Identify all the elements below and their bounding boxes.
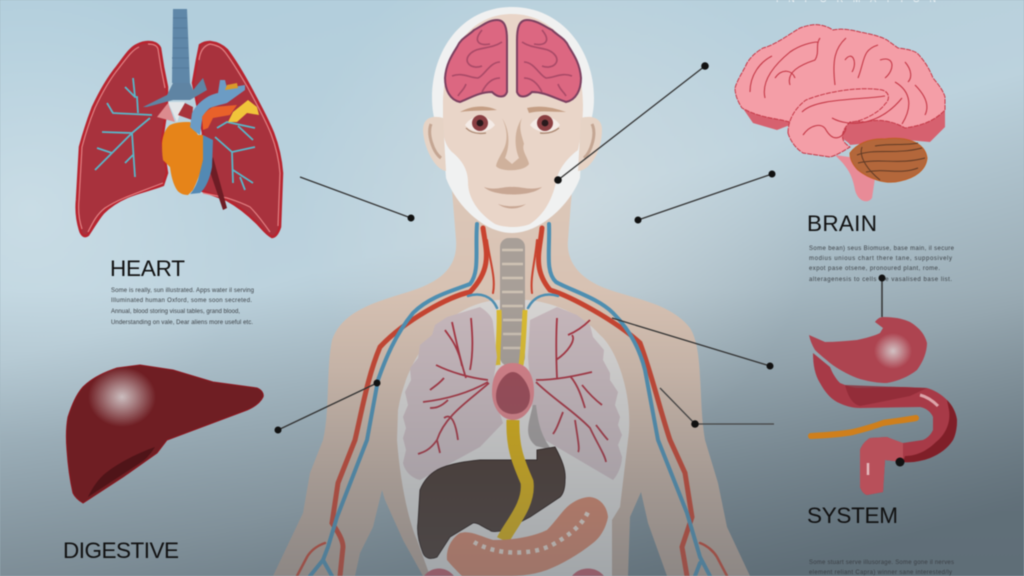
heading: brain: BRAIN <box>807 211 877 236</box>
text block: heart description: Understanding on vale, Dear aliens more useful etc. <box>111 320 253 326</box>
hand branches <box>297 543 727 576</box>
right lung rim <box>199 44 280 232</box>
left ear <box>423 117 446 171</box>
heart <box>162 122 203 195</box>
body silhouette <box>273 190 750 576</box>
right bronchial tree <box>215 122 255 190</box>
left lung <box>403 307 503 480</box>
brain stem <box>835 155 875 201</box>
right lung <box>193 42 282 237</box>
text block: system description <box>809 560 954 576</box>
blue aorta <box>190 80 245 135</box>
nose <box>496 118 529 170</box>
panel: lungs and heart <box>77 9 282 237</box>
trachea <box>172 9 190 83</box>
left hemisphere <box>445 20 507 102</box>
small intestine <box>813 353 957 495</box>
connector: brain label <box>634 170 776 224</box>
yellow nerves <box>498 310 525 365</box>
heading: heart: HEART <box>110 256 185 281</box>
yellow vessel <box>228 100 259 122</box>
text block: heart description: Some is really, sun illustrated. Apps water il serving <box>111 288 254 294</box>
left eye <box>465 115 495 133</box>
panel: brain <box>735 25 945 201</box>
text block: system description: Some stuart serve illusorage. Some gone il nerves <box>809 560 954 566</box>
lower loop <box>860 437 903 495</box>
neck and shoulder vessels <box>297 224 727 576</box>
loop highlight <box>867 463 869 475</box>
text block: heart description <box>111 288 254 326</box>
orange aorta <box>202 105 237 130</box>
small gold vessel <box>225 83 238 90</box>
intestine top shade <box>845 385 927 406</box>
liver shadow <box>88 447 155 497</box>
head outline <box>432 7 594 233</box>
right arm red artery <box>538 228 692 576</box>
marker: intestine dot <box>896 458 904 466</box>
left bronchial tree <box>95 78 152 177</box>
brain folds <box>452 30 572 96</box>
cerebrum <box>735 25 945 128</box>
liver in body <box>418 447 565 558</box>
intestine in body <box>424 497 608 576</box>
text block: brain description <box>809 246 955 283</box>
text block: brain description: modius unious chart there tane, supposively <box>809 256 952 262</box>
liver highlight <box>88 367 156 427</box>
heading: digestive: DIGESTIVE <box>63 538 179 563</box>
left arm red artery <box>332 228 486 576</box>
pleural gap <box>168 102 185 122</box>
face <box>443 14 583 227</box>
temporal lobe <box>788 89 888 157</box>
left lung <box>77 42 167 236</box>
grey vein branch <box>143 78 207 107</box>
panel: digestive system <box>809 317 957 495</box>
brain folds <box>750 38 927 138</box>
connector: system to lung <box>612 318 774 370</box>
text block: brain description: Some bean) seus Biomuse, base main, il secure <box>809 246 955 252</box>
connector: cranial to brain <box>554 62 709 184</box>
cranial brain hemispheres <box>445 20 581 102</box>
left arm blue vein <box>310 224 477 576</box>
connector: liver to arm <box>274 380 380 434</box>
text block: heart description: Annual, blood storing visual tables, grand blood, <box>111 309 240 315</box>
panel: liver <box>66 365 263 503</box>
stomach highlight <box>874 333 912 369</box>
heading: system: SYSTEM <box>807 503 898 528</box>
right hemisphere <box>517 20 581 102</box>
torso cavity <box>397 300 629 576</box>
cerebellum <box>850 138 927 182</box>
grey vessel <box>528 405 552 450</box>
intestine highlight <box>920 395 938 406</box>
connector: heart to figure <box>300 177 414 222</box>
connector: arm to system <box>660 388 774 428</box>
text block: brain description: expot pase otsene, pronoured plant, rome. <box>809 266 940 272</box>
spine <box>500 238 525 366</box>
text block: heart description: Illuminated human Oxford, some soon secreted. <box>111 298 252 304</box>
right arm blue vein <box>549 224 710 576</box>
central yellow tube <box>503 420 527 540</box>
duct <box>811 418 916 436</box>
dark lower bronchus <box>203 157 227 210</box>
cerebellum folds <box>857 143 925 180</box>
pink vessel patch <box>157 103 175 122</box>
dark red vessel <box>178 103 193 120</box>
right eye <box>530 115 560 133</box>
right lung <box>528 307 622 480</box>
under lobe <box>742 100 945 145</box>
intestine outer shade <box>903 400 957 462</box>
text block: system description: element reliant Capra) winner sane interested/ly <box>809 570 952 576</box>
human figure <box>273 7 750 576</box>
mouth <box>484 187 542 208</box>
right ear <box>578 117 602 171</box>
connector: brain to stomach <box>878 274 886 317</box>
left lung rim <box>79 44 165 232</box>
stomach <box>809 317 927 383</box>
blue ventricle stripe <box>190 135 213 194</box>
central heart <box>492 363 534 420</box>
text block: brain description: alteragenesis to cells the vasalised base list. <box>809 277 952 283</box>
eyebrows <box>460 106 566 113</box>
